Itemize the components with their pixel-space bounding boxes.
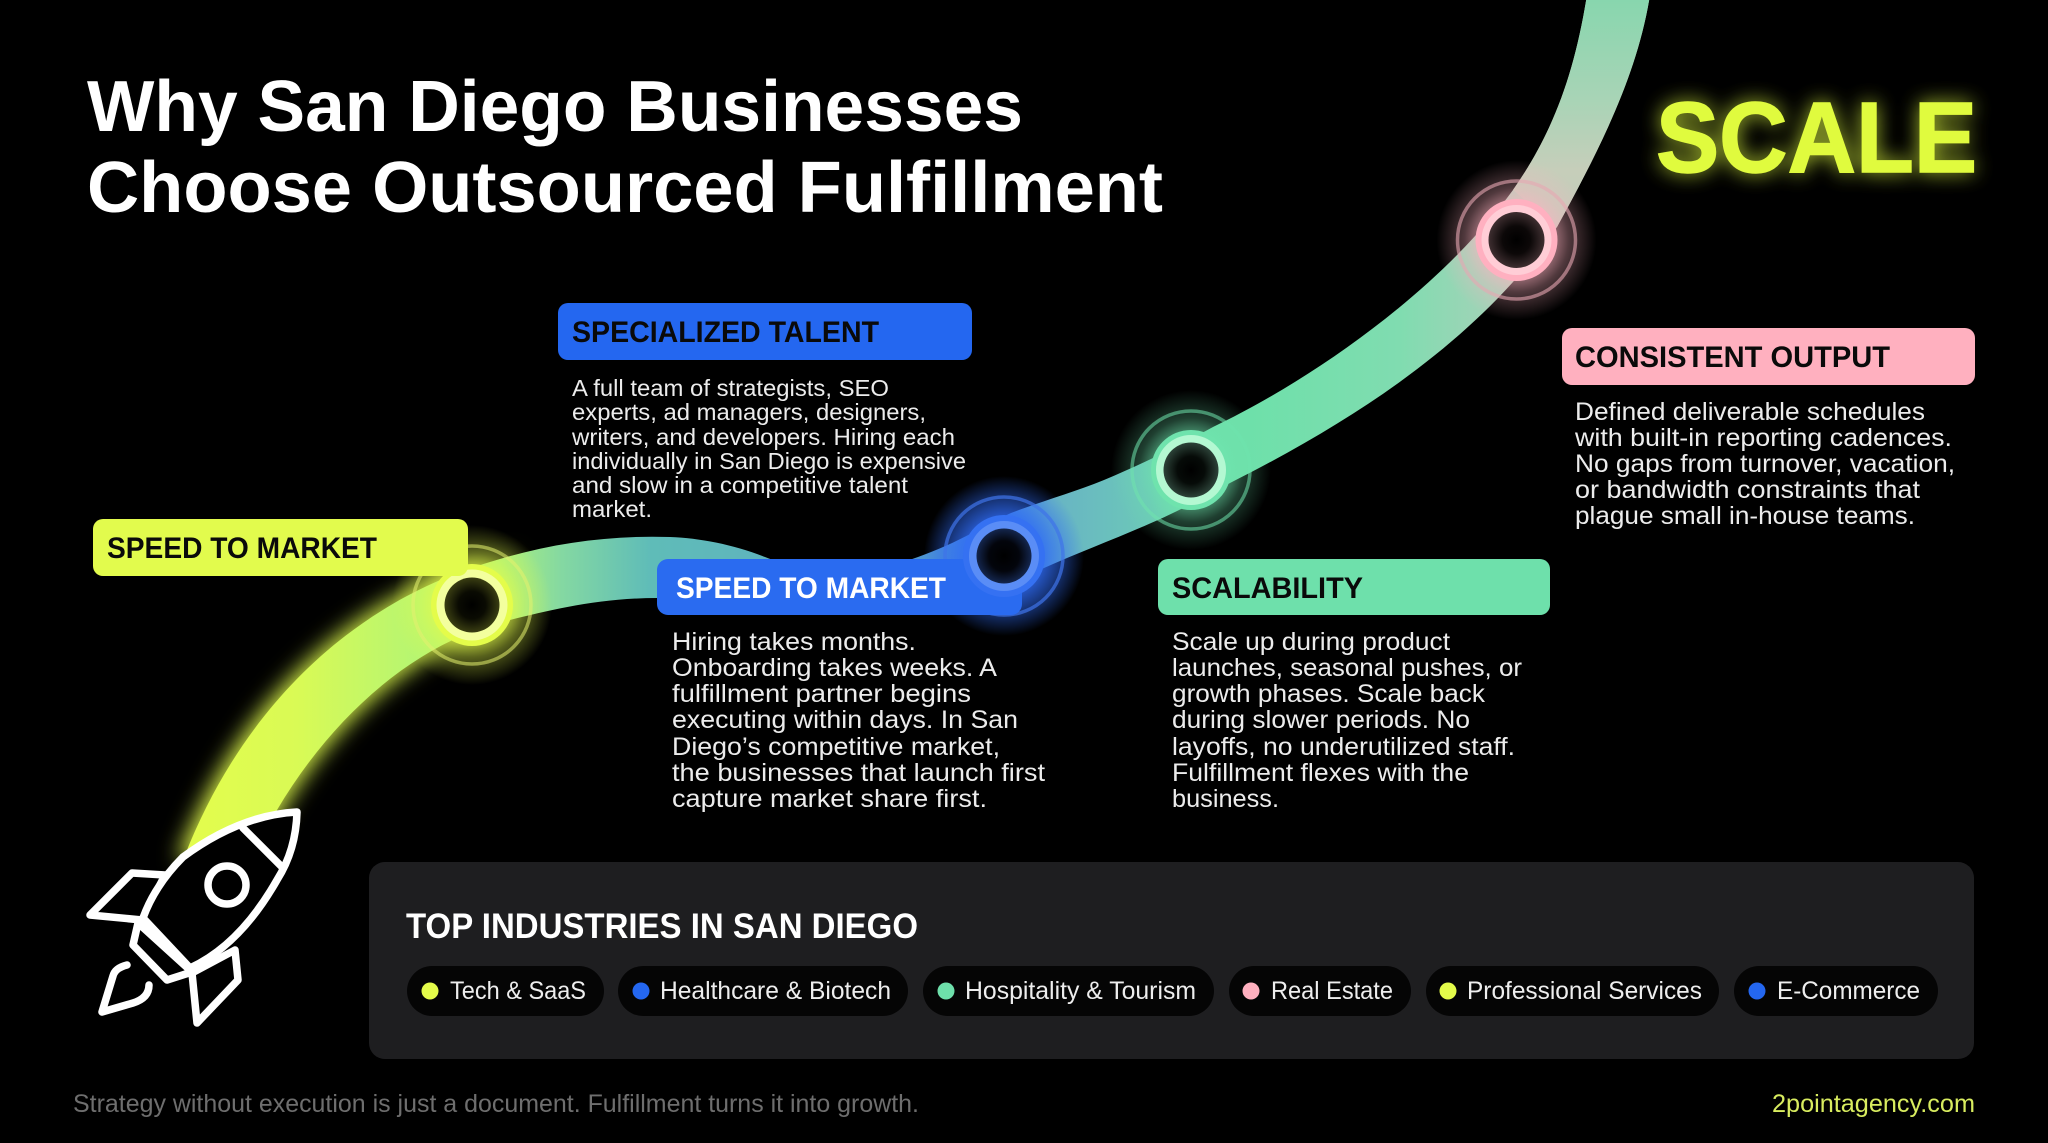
text: specialized talent: market. (572, 496, 652, 522)
text: speed to market: fulfillment partner begins (672, 680, 971, 708)
text: scalability: Fulfillment flexes with the (1172, 759, 1469, 787)
text: speed to market: the businesses that launch first (672, 759, 1045, 787)
label: speed to market yellow (93, 519, 468, 576)
pill: real estate (1229, 966, 1411, 1016)
ribbon glow (185, 542, 570, 860)
text: scalability: during slower periods. No (1172, 706, 1470, 734)
title: Why San Diego Businesses (87, 67, 1023, 147)
label: specialized talent: SPECIALIZED TALENT (572, 316, 879, 349)
pill: healthcare and biotech: Healthcare & Biotech (660, 977, 891, 1005)
text: scalability (1172, 628, 1522, 813)
pill: hospitality and tourism: Hospitality & Tourism (965, 977, 1196, 1005)
SCALE heading: SCALE (1656, 82, 1977, 194)
label: specialized talent (558, 303, 972, 360)
growth curve ribbon (185, 0, 1650, 860)
text: speed to market: Hiring takes months. (672, 628, 916, 656)
pill: tech and saas (407, 966, 604, 1016)
text: consistent output: plague small in-house teams. (1575, 502, 1915, 530)
text: consistent output (1574, 398, 1955, 530)
text: specialized talent: experts, ad managers, designers, (572, 399, 926, 425)
panel: top industries (369, 862, 1974, 1059)
label: consistent output: CONSISTENT OUTPUT (1575, 341, 1890, 374)
pill: e-commerce: E-Commerce (1777, 977, 1920, 1005)
pill: professional services: Professional Services (1467, 977, 1702, 1005)
text: consistent output: or bandwidth constraints that (1575, 476, 1920, 504)
text: consistent output: No gaps from turnover, vacation, (1575, 450, 1955, 478)
node: green (1111, 390, 1271, 550)
text: speed to market: executing within days. In San (672, 706, 1018, 734)
text: scalability: business. (1172, 785, 1279, 813)
text: consistent output: with built-in reporting cadences. (1574, 424, 1952, 452)
footer url: 2pointagency.com (1772, 1090, 1975, 1118)
text: speed to market: Diego’s competitive market, (672, 733, 1000, 761)
text: speed to market: Onboarding takes weeks. A (672, 654, 997, 682)
text: specialized talent: individually in San Diego is expensive (572, 448, 966, 474)
footer tagline: Strategy without execution is just a document. Fulfillment turns it into growth. (73, 1090, 919, 1118)
pill: healthcare and biotech (618, 966, 908, 1016)
pill: hospitality and tourism (923, 966, 1214, 1016)
text: specialized talent: and slow in a competitive talent (572, 472, 908, 498)
text: scalability: Scale up during product (1172, 628, 1450, 656)
text: scalability: layoffs, no underutilized staff. (1172, 733, 1515, 761)
text: specialized talent: A full team of strategists, SEO (572, 375, 889, 401)
node core: blue (963, 515, 1045, 597)
label: speed to market blue: SPEED TO MARKET (676, 572, 946, 605)
label: scalability (1158, 559, 1550, 615)
panel heading: TOP INDUSTRIES IN SAN DIEGO (406, 907, 918, 946)
node: pink (1436, 160, 1596, 320)
node: yellow (392, 525, 552, 685)
text: scalability: growth phases. Scale back (1172, 680, 1486, 708)
title: Choose Outsourced Fulfillment (87, 148, 1163, 228)
text: specialized talent (571, 375, 966, 522)
text: specialized talent: writers, and developers. Hiring each (571, 424, 955, 450)
text: consistent output: Defined deliverable schedules (1575, 398, 1925, 426)
text: speed to market (672, 628, 1045, 813)
title (87, 67, 1163, 228)
SCALE heading: SCALE (1656, 82, 1977, 194)
ribbon top section (1513, 0, 1650, 227)
pill: tech and saas: Tech & SaaS (450, 977, 586, 1005)
pill: e-commerce (1734, 966, 1938, 1016)
text: scalability: launches, seasonal pushes, or (1172, 654, 1522, 682)
node glow: blue (924, 476, 1084, 636)
pill: real estate: Real Estate (1271, 977, 1393, 1005)
pill: professional services (1426, 966, 1719, 1016)
icon: rocket (90, 812, 297, 1023)
label: scalability: SCALABILITY (1172, 572, 1363, 605)
text: speed to market: capture market share first. (672, 785, 987, 813)
label: speed to market blue (657, 559, 1022, 615)
label: consistent output (1562, 328, 1975, 385)
label: speed to market yellow: SPEED TO MARKET (107, 532, 377, 565)
